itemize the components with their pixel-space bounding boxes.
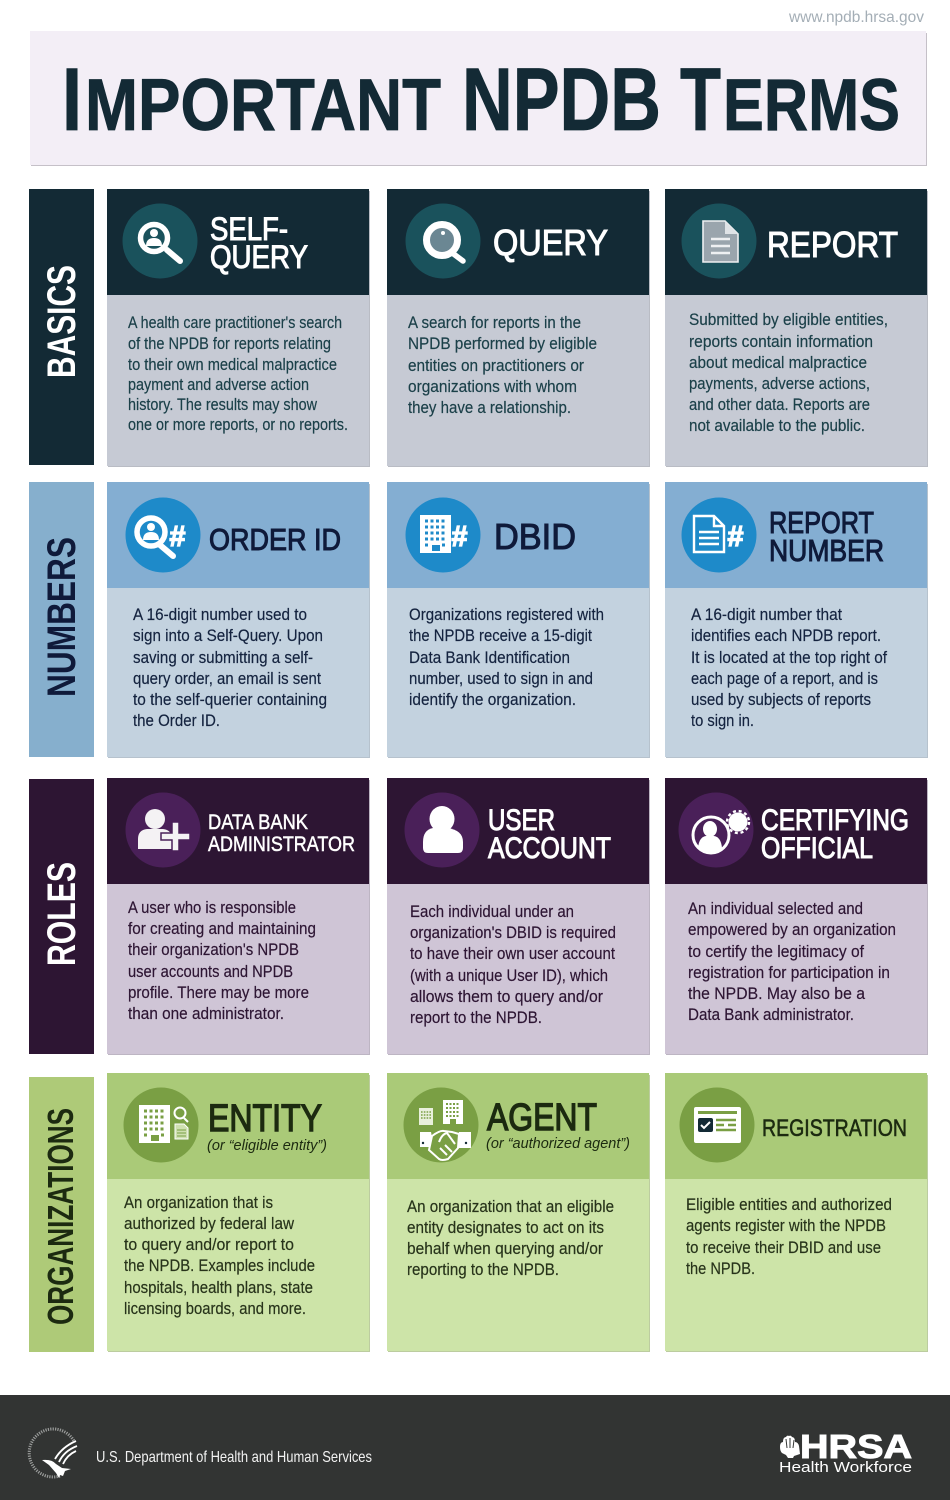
text: entity definition: to query and/or report to xyxy=(124,1236,294,1254)
text: report definition: not available to the public. xyxy=(689,417,865,435)
text: self-query definition: to their own medical malpractice xyxy=(128,356,337,374)
text: dbid definition: the NPDB receive a 15-digit xyxy=(409,627,592,645)
text: report definition: reports contain information xyxy=(689,333,873,351)
text: query definition: entities on practitioners or xyxy=(408,357,584,375)
text: user account definition: to have their own user account xyxy=(410,945,615,963)
heading: self-query: QUERY xyxy=(210,239,308,275)
text: user account definition: allows them to query and/or xyxy=(410,988,603,1006)
text: query definition: organizations with whom xyxy=(408,378,577,396)
text: agent definition: An organization that an eligible xyxy=(407,1198,614,1216)
text: certifying official definition: to certify the legitimacy of xyxy=(688,943,864,961)
text: report definition: about medical malpractice xyxy=(689,354,867,372)
icon: order id magnifier and hash: # xyxy=(169,521,186,553)
icon: query magnifier xyxy=(406,204,480,278)
icon: dbid building and hash xyxy=(406,498,480,572)
text: query definition: NPDB performed by eligible xyxy=(408,335,597,353)
text: certifying official definition: Data Bank administrator. xyxy=(688,1006,854,1024)
text: self-query definition: payment and adverse action xyxy=(128,376,309,394)
text: data bank administrator definition: for creating and maintaining xyxy=(128,920,316,938)
text: dbid definition: Organizations registered with xyxy=(409,606,604,624)
text: entity definition xyxy=(124,1194,315,1318)
icon: dbid building and hash: # xyxy=(451,521,468,553)
text: agent definition: reporting to the NPDB. xyxy=(407,1261,559,1279)
section label: basics xyxy=(29,189,94,465)
text: user account definition: organization's DBID is required xyxy=(410,924,616,942)
icon: agent buildings and handshake xyxy=(404,1088,478,1162)
panel: registration xyxy=(665,1073,928,1352)
text: report number definition: identifies each NPDB report. xyxy=(691,627,881,645)
heading: query: QUERY xyxy=(493,222,608,263)
heading: data bank administrator: ADMINISTRATOR xyxy=(208,833,355,856)
text: query definition xyxy=(408,314,597,417)
section label: roles: ROLES xyxy=(40,862,84,966)
heading: report number: NUMBER xyxy=(769,533,884,568)
text: registration definition: Eligible entities and authorized xyxy=(686,1196,892,1214)
text: order id definition: to the self-querier containing xyxy=(133,691,327,709)
icon: report document xyxy=(682,204,756,278)
title banner: ERMS xyxy=(723,65,900,146)
heading: certifying official: OFFICIAL xyxy=(761,832,873,865)
text: entity definition: authorized by federal law xyxy=(124,1215,294,1233)
text: certifying official definition: the NPDB. May also be a xyxy=(688,985,866,1003)
icon: self-query magnifier xyxy=(122,204,198,278)
title banner: MPORTANT xyxy=(85,65,441,146)
text: data bank administrator definition: A user who is responsible xyxy=(128,899,296,917)
text: query definition: they have a relationship. xyxy=(408,399,571,417)
panel: user account xyxy=(387,778,650,1055)
text: report number definition: used by subjects of reports xyxy=(691,691,871,709)
text: self-query definition: of the NPDB for reports relating xyxy=(128,335,331,353)
text: certifying official definition xyxy=(688,900,896,1024)
heading: user account xyxy=(488,804,611,865)
heading: self-query xyxy=(210,211,308,275)
text: report number definition xyxy=(691,606,887,730)
icon: report number document and hash: # xyxy=(727,521,744,553)
section label: roles xyxy=(29,779,94,1054)
text: hhs department name: U.S. Department of Health and Human Services xyxy=(96,1449,372,1466)
icon: user xyxy=(404,792,480,868)
text: registration definition xyxy=(686,1196,892,1278)
section label: organizations: ORGANIZATIONS xyxy=(40,1108,81,1325)
heading: entity: (or “eligible entity”) xyxy=(207,1137,327,1154)
icon: certifying official xyxy=(678,792,754,868)
text: dbid definition xyxy=(409,606,604,709)
text: report definition xyxy=(689,311,888,435)
text: query definition: A search for reports in the xyxy=(408,314,581,332)
panel: certifying official xyxy=(665,778,928,1055)
logo: hrsa health workforce: HRSA xyxy=(800,1429,912,1466)
text: self-query definition xyxy=(128,314,348,434)
icon: hhs seal xyxy=(29,1429,77,1478)
text: registration definition: the NPDB. xyxy=(686,1260,755,1278)
text: registration definition: to receive their DBID and use xyxy=(686,1239,881,1257)
panel: dbid xyxy=(387,482,650,758)
icon: order id magnifier and hash xyxy=(126,498,200,572)
text: report definition: and other data. Reports are xyxy=(689,396,870,414)
icon: administrator with plus xyxy=(126,792,200,868)
text: dbid definition: identify the organization. xyxy=(409,691,576,709)
website url: www.npdb.hrsa.gov xyxy=(788,9,924,26)
section label: numbers: NUMBERS xyxy=(40,537,84,697)
text: agent definition xyxy=(407,1198,614,1279)
heading: data bank administrator xyxy=(208,811,355,856)
text: self-query definition: one or more reports, or no reports. xyxy=(128,416,348,434)
text: report definition: payments, adverse actions, xyxy=(689,375,870,393)
text: user account definition: report to the NPDB. xyxy=(410,1009,542,1027)
heading: report number xyxy=(769,505,884,568)
text: entity definition: hospitals, health plans, state xyxy=(124,1279,313,1297)
panel: agent xyxy=(387,1073,650,1352)
text: report number definition: to sign in. xyxy=(691,712,754,730)
text: data bank administrator definition xyxy=(128,899,316,1023)
panel: report xyxy=(665,189,928,467)
heading: certifying official xyxy=(761,804,909,865)
text: self-query definition: A health care practitioner's search xyxy=(128,314,342,332)
title banner: NPDB xyxy=(462,49,661,149)
section label: organizations xyxy=(29,1077,94,1352)
title banner: T xyxy=(680,49,721,149)
text: order id definition: the Order ID. xyxy=(133,712,220,730)
heading: agent xyxy=(486,1097,630,1152)
text: report number definition: It is located at the top right of xyxy=(691,649,887,667)
text: entity definition: licensing boards, and more. xyxy=(124,1300,306,1318)
heading: entity: ENTITY xyxy=(208,1098,322,1140)
text: data bank administrator definition: user accounts and NPDB xyxy=(128,963,293,981)
text: registration definition: agents register with the NPDB xyxy=(686,1217,886,1235)
text: report number definition: each page of a report, and is xyxy=(691,670,878,688)
footer xyxy=(0,1395,950,1500)
text: user account definition xyxy=(410,903,616,1027)
text: entity definition: An organization that is xyxy=(124,1194,273,1212)
panel: order id xyxy=(107,482,370,758)
text: agent definition: entity designates to act on its xyxy=(407,1219,604,1237)
panel: self-query xyxy=(107,189,370,467)
text: dbid definition: Data Bank Identification xyxy=(409,649,570,667)
icon: registration card xyxy=(680,1088,754,1162)
text: certifying official definition: empowered by an organization xyxy=(688,921,896,939)
title banner: I xyxy=(62,49,82,149)
text: order id definition: saving or submitting a self- xyxy=(133,649,313,667)
panel: report number xyxy=(665,482,928,758)
heading: self-query: SELF- xyxy=(210,211,288,247)
text: user account definition: (with a unique User ID), which xyxy=(410,967,608,985)
text: data bank administrator definition: than one administrator. xyxy=(128,1005,284,1023)
text: agent definition: behalf when querying and/or xyxy=(407,1240,603,1258)
heading: order id: ORDER ID xyxy=(209,522,341,557)
panel: data bank administrator xyxy=(107,778,370,1055)
heading: certifying official: CERTIFYING xyxy=(761,804,909,837)
panel: entity xyxy=(107,1073,370,1352)
logo: hrsa health workforce xyxy=(779,1429,912,1476)
heading: registration: REGISTRATION xyxy=(762,1115,907,1142)
text: certifying official definition: An individual selected and xyxy=(688,900,863,918)
text: report number definition: A 16-digit number that xyxy=(691,606,842,624)
text: order id definition: sign into a Self-Query. Upon xyxy=(133,627,323,645)
heading: dbid: DBID xyxy=(494,516,576,557)
icon: entity building, magnifier and document xyxy=(124,1088,198,1162)
logo: hrsa health workforce: Health Workforce xyxy=(779,1459,912,1476)
text: entity definition: the NPDB. Examples include xyxy=(124,1257,315,1275)
text: order id definition: A 16-digit number used to xyxy=(133,606,307,624)
section label: basics: BASICS xyxy=(40,265,84,378)
panel: query xyxy=(387,189,650,467)
text: report definition: Submitted by eligible entities, xyxy=(689,311,888,329)
text: user account definition: Each individual under an xyxy=(410,903,574,921)
title banner xyxy=(30,31,927,166)
text: self-query definition: history. The results may show xyxy=(128,396,317,414)
heading: user account: USER xyxy=(488,804,555,837)
section label: numbers xyxy=(29,482,94,757)
text: order id definition: query order, an email is sent xyxy=(133,670,321,688)
heading: report number: REPORT xyxy=(769,505,874,540)
text: dbid definition: number, used to sign in and xyxy=(409,670,593,688)
heading: data bank administrator: DATA BANK xyxy=(208,811,308,834)
icon: report number document and hash xyxy=(682,498,756,572)
text: certifying official definition: registration for participation in xyxy=(688,964,890,982)
heading: agent: (or “authorized agent”) xyxy=(486,1135,630,1152)
heading: entity xyxy=(207,1098,327,1154)
text: order id definition xyxy=(133,606,327,730)
text: data bank administrator definition: profile. There may be more xyxy=(128,984,309,1002)
heading: agent: AGENT xyxy=(487,1097,597,1139)
heading: report: REPORT xyxy=(767,224,898,265)
heading: user account: ACCOUNT xyxy=(488,832,611,865)
text: data bank administrator definition: their organization's NPDB xyxy=(128,941,299,959)
